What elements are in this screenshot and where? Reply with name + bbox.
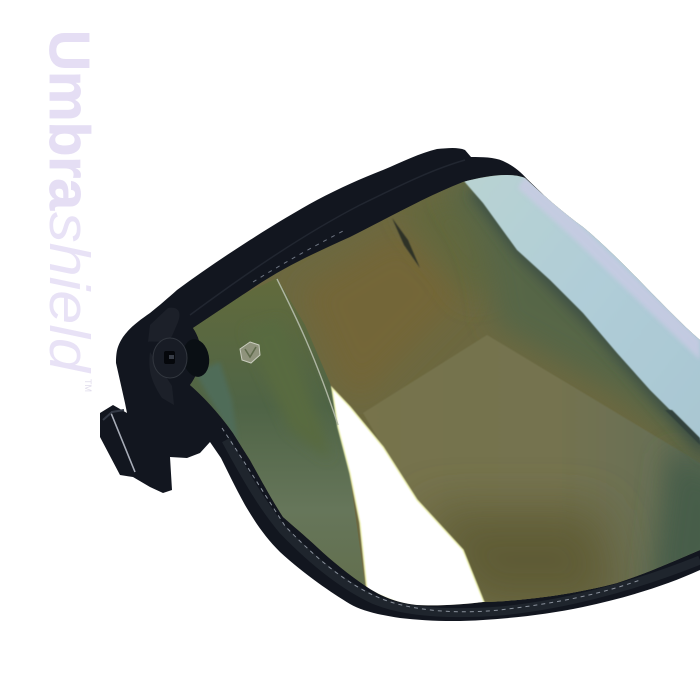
lavender rim of band (518, 176, 700, 360)
lens base tone (180, 170, 700, 620)
lower middle brown tone (420, 510, 620, 610)
dark crack line on reflection top (392, 218, 420, 268)
pivot bracket detail (148, 308, 180, 342)
frame: black visor binding and headband bracket (100, 148, 700, 621)
left green strip (190, 278, 365, 586)
pale reflected sky band (463, 170, 700, 450)
brand wordmark (37, 30, 101, 392)
left strip olive tone (284, 394, 324, 451)
dark slit at right edge (665, 410, 700, 445)
brand wordmark: shield (37, 212, 101, 374)
clip notch detail (103, 410, 124, 420)
darkest inner band edge (475, 190, 700, 445)
brown centre reflection (324, 258, 435, 367)
lower arm plate (149, 352, 174, 405)
strap clip highlight (111, 413, 135, 472)
lower right lit plane (363, 335, 700, 610)
stitching: lower edge (222, 428, 640, 612)
rivet: screw head (153, 337, 212, 379)
brand wordmark: Umbra (37, 30, 101, 211)
frame highlight: seam ridge on top binding (190, 160, 465, 315)
upper olive tone (424, 196, 477, 283)
thin reflection line (277, 279, 338, 425)
lens logo badge (240, 342, 260, 363)
bright white reflection wedge (332, 388, 487, 610)
right green band (456, 182, 700, 449)
brand wordmark: TM (83, 379, 93, 392)
left strip teal patch near pivot (197, 362, 236, 436)
lower right green tone (650, 450, 700, 600)
stitching: dashed line along lens binding (253, 230, 345, 282)
lens (180, 170, 700, 620)
visor (100, 148, 700, 621)
frame: lighter slate lower binding (226, 440, 700, 613)
